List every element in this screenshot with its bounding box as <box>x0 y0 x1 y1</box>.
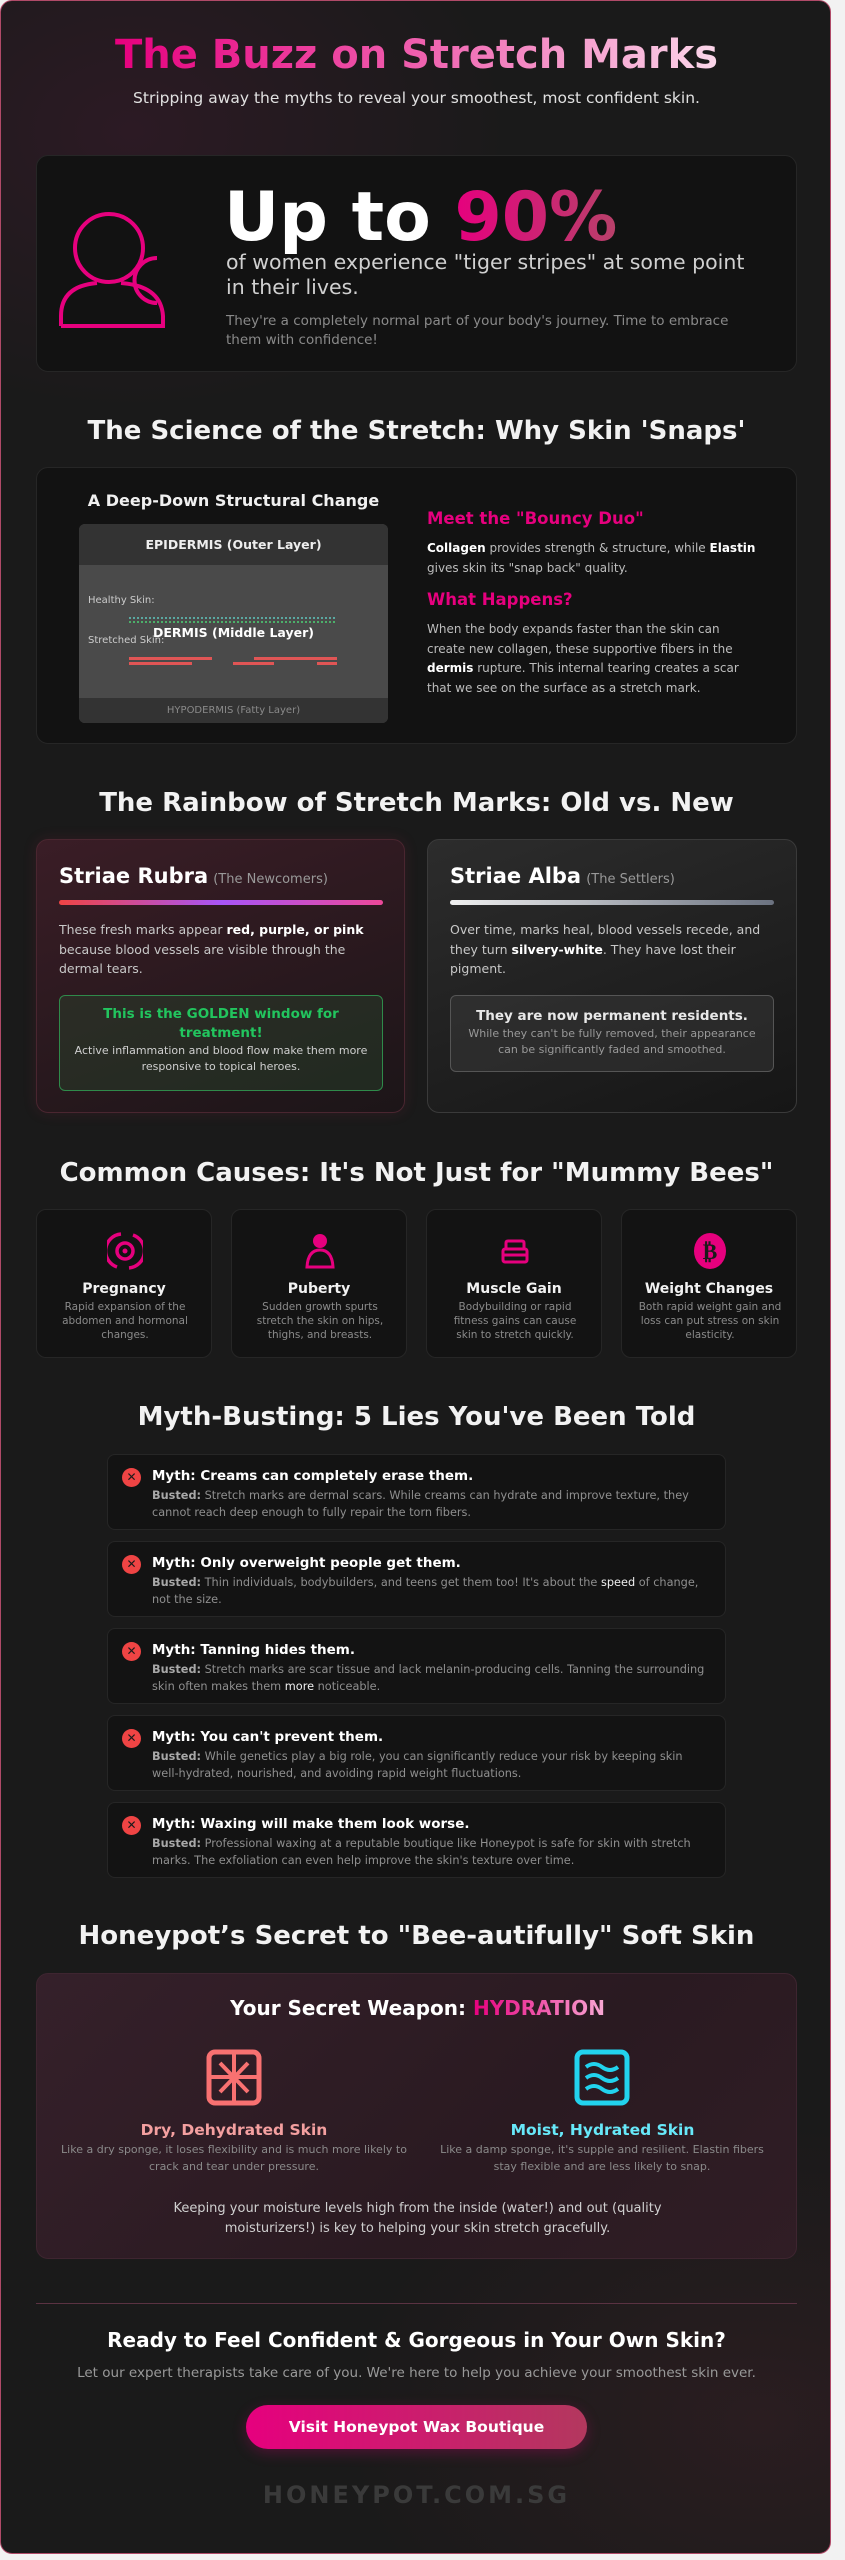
label: dry: Dry, Dehydrated Skin <box>141 2121 327 2139</box>
myth 2: Myth: Only overweight people get them. <box>152 1555 461 1571</box>
cta heading: Ready to Feel Confident & Gorgeous in Your Own Skin? <box>107 2328 726 2352</box>
skin diagram: DERMIS (Middle Layer) <box>153 625 314 640</box>
myth 3: ✕ <box>126 1644 137 1658</box>
subtitle: Stripping away the myths to reveal your smoothest, most confident skin. <box>133 89 700 107</box>
icon: hydrated <box>574 2050 630 2106</box>
panel: striae rubra: These fresh marks appear red, purple, or pink because blood vessels are visible through the dermal tears. <box>59 922 364 976</box>
panel: hydration: Like a damp sponge, it's supple and resilient. Elastin fibers stay flexible and are less likely to snap. <box>440 2143 764 2173</box>
heading: rainbow: The Rainbow of Stretch Marks: Old vs. New <box>99 788 734 818</box>
myth 3 <box>107 1628 726 1704</box>
myth 3: Busted: Stretch marks are scar tissue and lack melanin-producing cells. Tanning the surrounding skin often makes them more noticeable. <box>152 1663 704 1693</box>
callout: golden window: treatment! <box>179 1025 263 1041</box>
skin diagram: EPIDERMIS (Outer Layer) <box>145 537 322 552</box>
heading: science: The Science of the Stretch: Why Skin 'Snaps' <box>88 416 745 446</box>
panel: hydration: Like a dry sponge, it loses flexibility and is much more likely to crack and tear under pressure. <box>61 2143 407 2173</box>
card: pregnancy: Rapid expansion of the abdomen and hormonal changes. <box>62 1301 188 1341</box>
hydration heading: Your Secret Weapon: HYDRATION <box>230 1996 605 2020</box>
stat number: Up to 90% <box>224 178 617 257</box>
cta button <box>246 2405 587 2449</box>
text: bouncy duo: What Happens? <box>427 590 573 609</box>
myth 5: ✕ <box>126 1818 137 1832</box>
myth 2 <box>107 1541 726 1617</box>
myth 1: Myth: Creams can completely erase them. <box>152 1468 473 1484</box>
card: muscle gain: Muscle Gain <box>466 1281 562 1297</box>
card: muscle gain: Bodybuilding or rapid fitness gains can cause skin to stretch quickly. <box>454 1301 576 1341</box>
myth 5: Myth: Waxing will make them look worse. <box>152 1816 470 1832</box>
myth 1: Busted: Stretch marks are dermal scars. While creams can hydrate and improve texture, they cannot reach deep enough to fully repair the torn fibers. <box>152 1489 689 1519</box>
card: puberty: Sudden growth spurts stretch the skin on hips, thighs, and breasts. <box>257 1301 383 1341</box>
card: pregnancy <box>36 1209 212 1358</box>
skin diagram: HYPODERMIS (Fatty Layer) <box>167 705 300 716</box>
card: pregnancy: Pregnancy <box>82 1281 166 1297</box>
cta button: Visit Honeypot Wax Boutique <box>289 2418 544 2436</box>
card: weight changes <box>621 1209 797 1358</box>
hydration note: Keeping your moisture levels high from the inside (water!) and out (quality moisturizers!) is key to helping your skin stretch gracefully. <box>173 2201 662 2236</box>
cta text: Let our expert therapists take care of you. We're here to help you achieve your smoothest skin ever. <box>77 2365 756 2381</box>
myth 5: Busted: Professional waxing at a reputable boutique like Honeypot is safe for skin with stretch marks. The exfoliation can even help improve the skin's texture over time. <box>152 1837 691 1867</box>
footer brand: HONEYPOT.COM.SG <box>263 2481 570 2509</box>
diagram title: A Deep-Down Structural Change <box>88 491 379 510</box>
myth 4: Myth: You can't prevent them. <box>152 1729 383 1745</box>
callout: golden window <box>59 995 383 1091</box>
panel: striae alba <box>427 839 797 1113</box>
heading: causes: Common Causes: It's Not Just for "Mummy Bees" <box>60 1158 773 1188</box>
card: weight changes: Both rapid weight gain and loss can put stress on skin elasticity. <box>639 1301 781 1341</box>
text: bouncy duo: Meet the "Bouncy Duo" <box>427 509 644 528</box>
skin diagram: Stretched Skin: <box>88 635 164 646</box>
myth 1: ✕ <box>126 1470 137 1484</box>
myth 5 <box>107 1802 726 1878</box>
myth 4 <box>107 1715 726 1791</box>
skin diagram: Healthy Skin: <box>88 595 155 606</box>
panel: science <box>36 467 797 744</box>
card: weight changes: ₿ <box>703 1240 718 1265</box>
myth 3: Myth: Tanning hides them. <box>152 1642 355 1658</box>
myth 4: ✕ <box>126 1731 137 1745</box>
myth 2: ✕ <box>126 1557 137 1571</box>
text: bouncy duo: When the body expands faster than the skin can create new collagen, these supportive fibers in the dermis rupture. This internal tearing creates a scar that we see on the surface as a stretch mark. <box>427 622 739 694</box>
callout: permanent: can be significantly faded and smoothed. <box>498 1043 726 1056</box>
label: hydrated: Moist, Hydrated Skin <box>511 2121 694 2139</box>
callout: permanent <box>450 995 774 1072</box>
text: bouncy duo: Collagen provides strength & structure, while Elastin gives skin its "snap back" quality. <box>427 541 755 574</box>
title: The Buzz on Stretch Marks <box>115 32 718 78</box>
text: bouncy duo <box>427 509 755 694</box>
heading: honeypot secret: Honeypot’s Secret to "Bee-autifully" Soft Skin <box>79 1921 754 1951</box>
panel: stat <box>36 155 797 372</box>
icon: women <box>59 212 165 328</box>
panel: striae alba: Over time, marks heal, blood vessels recede, and they turn silvery-white. They have lost their pigment. <box>450 922 760 976</box>
myth 1 <box>107 1454 726 1530</box>
skin diagram <box>79 524 388 723</box>
panel: striae rubra <box>36 839 405 1113</box>
panel: striae rubra: Striae Rubra (The Newcomers) <box>59 864 328 888</box>
card: puberty: Puberty <box>288 1281 350 1297</box>
myth 4: Busted: While genetics play a big role, you can significantly reduce your risk by keeping skin well-hydrated, nourished, and avoiding rapid weight fluctuations. <box>152 1750 683 1780</box>
callout: golden window: This is the GOLDEN window for <box>103 1006 339 1022</box>
heading: myths: Myth-Busting: 5 Lies You've Been Told <box>138 1402 695 1432</box>
callout: permanent: While they can't be fully removed, their appearance <box>468 1027 756 1040</box>
myth 2: Busted: Thin individuals, bodybuilders, and teens get them too! It's about the speed of change, not the size. <box>152 1576 698 1606</box>
panel: hydration <box>36 1973 797 2259</box>
callout: golden window: responsive to topical heroes. <box>142 1060 300 1073</box>
card: puberty <box>231 1209 407 1358</box>
stat text: of women experience "tiger stripes" at some point in their lives. <box>226 250 744 299</box>
callout: permanent: They are now permanent residents. <box>476 1008 748 1024</box>
callout: golden window: Active inflammation and blood flow make them more <box>75 1044 367 1057</box>
icon: dry <box>206 2050 262 2106</box>
card: weight changes: Weight Changes <box>645 1281 773 1297</box>
card: muscle gain <box>426 1209 602 1358</box>
stat note: They're a completely normal part of your body's journey. Time to embrace them with confidence! <box>226 313 728 348</box>
panel: striae alba: Striae Alba (The Settlers) <box>450 864 675 888</box>
